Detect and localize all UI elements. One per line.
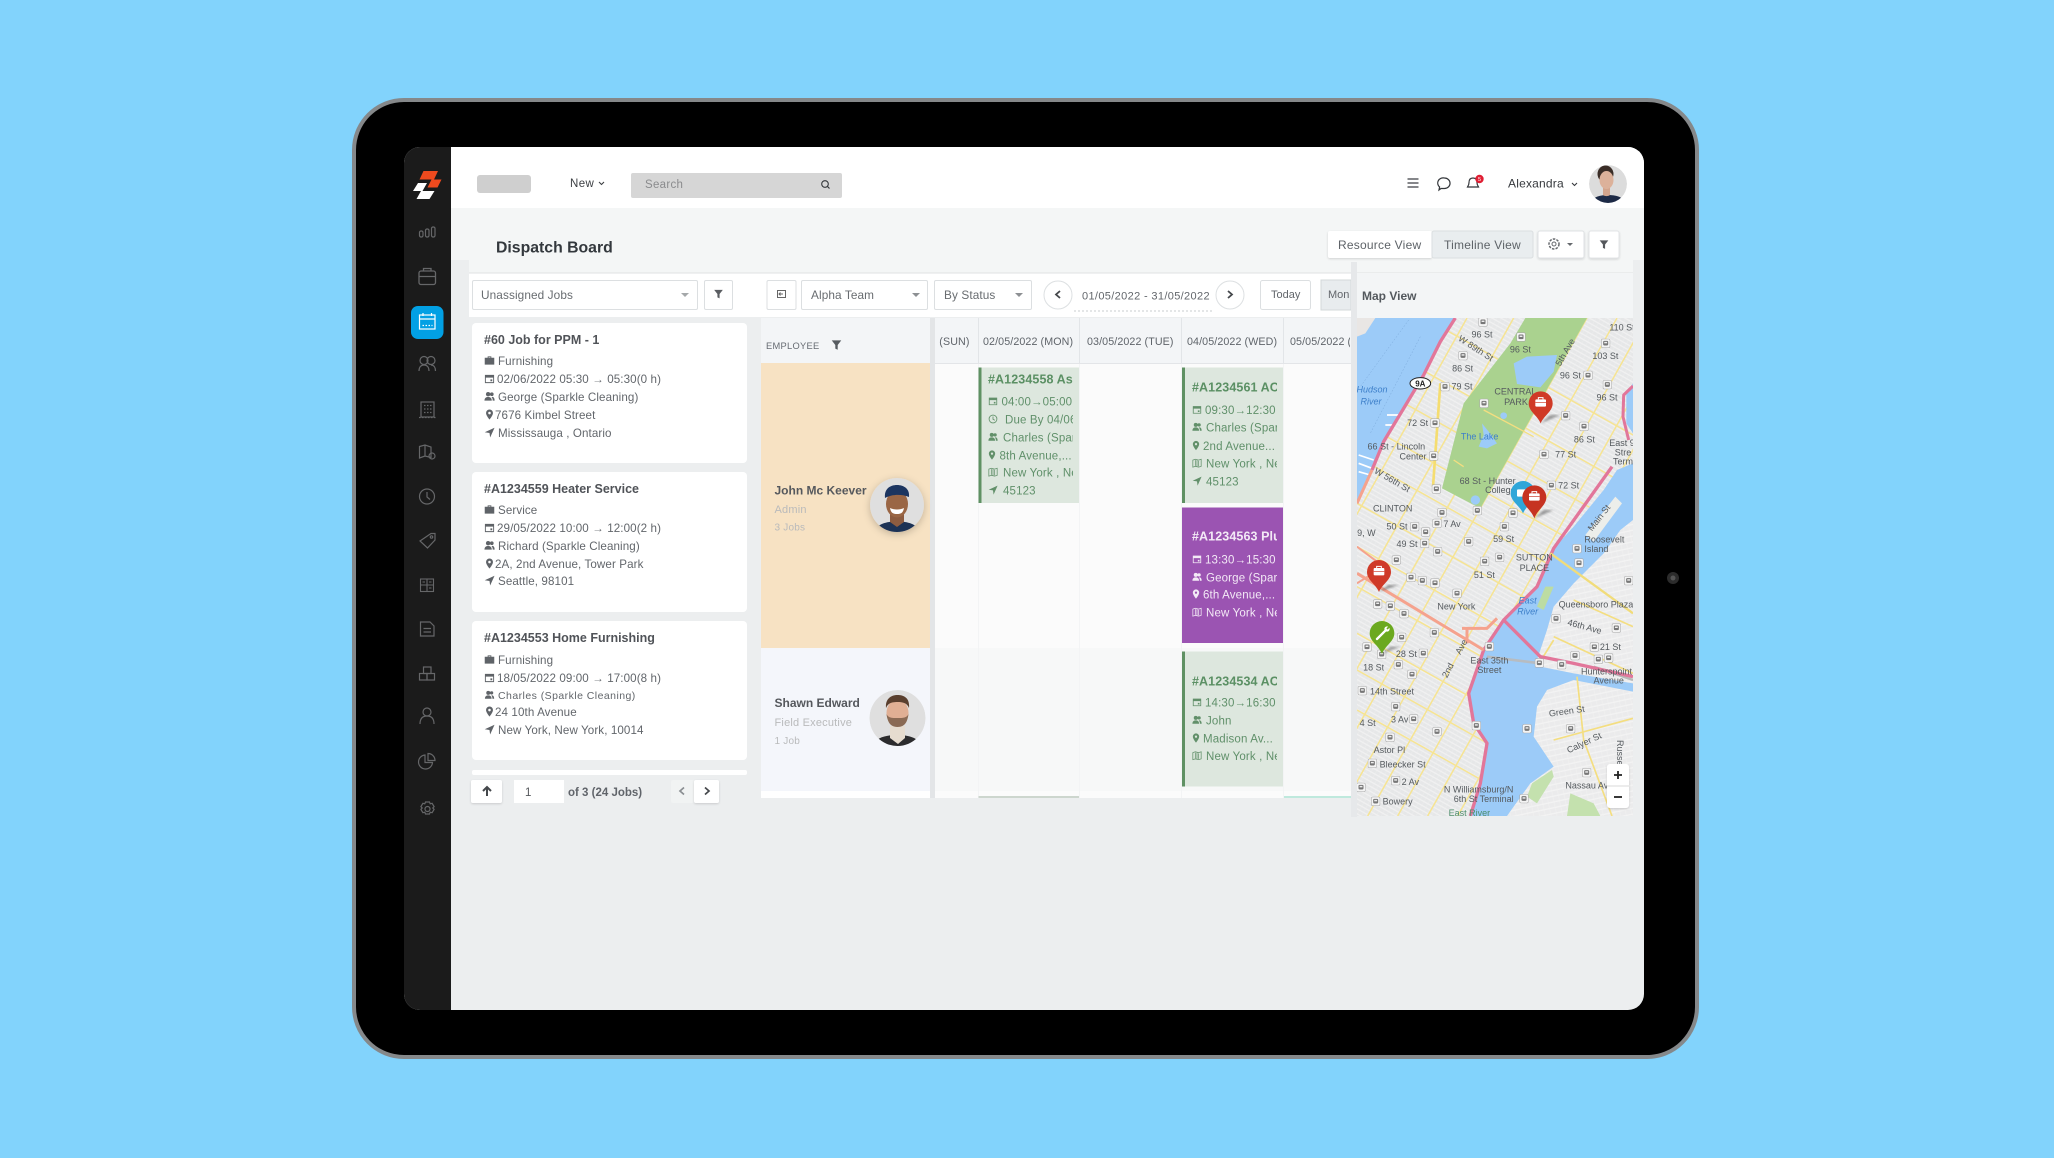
toolbar band xyxy=(469,273,1633,317)
employee row: John Mc Keever xyxy=(761,363,930,648)
icon: reports xyxy=(419,754,435,769)
icon: inventory xyxy=(420,667,434,680)
map labels: 59 St xyxy=(1493,534,1515,544)
map labels: 86 St xyxy=(1452,363,1474,373)
date header row: 02/05/2022 (MON) xyxy=(983,336,1073,348)
map labels: Calyer St xyxy=(1565,730,1604,755)
map labels: 18 St xyxy=(1363,662,1385,672)
collapse button xyxy=(767,280,796,310)
transit stops xyxy=(1357,318,1633,806)
map labels: East xyxy=(1519,595,1537,605)
job block: A1234561: 09:30→12:30 xyxy=(1205,405,1276,417)
job card: A1234553: #A1234553 Home Furnishing xyxy=(484,631,655,645)
icon: map xyxy=(420,445,435,459)
map labels: 2nd xyxy=(1440,661,1456,679)
job block: A1234534: Madison Av... xyxy=(1203,734,1273,746)
east river xyxy=(1626,383,1633,433)
logo xyxy=(413,171,442,199)
map labels: Center xyxy=(1399,451,1427,461)
map labels: 7 Av xyxy=(1443,519,1461,529)
job card: A1234553: 18/05/2022 09:00 → 17:00(8 h) xyxy=(497,672,661,685)
job block: A1234561 xyxy=(1182,368,1348,503)
job card: A1234559: 29/05/2022 10:00 → 12:00(2 h) xyxy=(497,522,661,535)
map labels: Queensboro Plaza xyxy=(1559,600,1633,610)
job block: A1234558: 04:00→05:00 xyxy=(1002,396,1072,408)
job card: A1234559: Service xyxy=(498,504,537,517)
team select: Alpha Team xyxy=(811,288,874,302)
job block: A1234558: New York , New York xyxy=(1003,468,1113,480)
pin: job blue xyxy=(1511,481,1535,513)
icon: notifications: 5 xyxy=(1478,177,1481,183)
today button xyxy=(1260,280,1310,310)
map labels: 96 St xyxy=(1596,392,1618,402)
job block: A1234561: 45123 xyxy=(1206,476,1239,488)
employee row: John Mc Keever: Admin xyxy=(774,504,807,516)
map panel header: Map View xyxy=(1362,289,1417,303)
icon: calendar active xyxy=(411,306,444,339)
job block: A1234534: John xyxy=(1206,716,1232,728)
team select xyxy=(802,280,928,310)
map labels xyxy=(1356,322,1635,818)
map labels: 6th St Terminal xyxy=(1454,794,1514,804)
month button xyxy=(1321,280,1359,310)
map labels: The Lake xyxy=(1461,432,1498,442)
date range: 01/05/2022 - 31/05/2022 xyxy=(1082,290,1210,302)
map labels: Street xyxy=(1477,665,1502,675)
map labels: Stre xyxy=(1615,448,1631,458)
job block: A1234561: 2nd Avenue... xyxy=(1203,441,1275,453)
hudson river xyxy=(1357,318,1454,503)
schedule grid xyxy=(930,262,1357,817)
map labels: Hudson xyxy=(1356,385,1388,395)
job block: A1234563: #A1234563 Plumbing xyxy=(1192,530,1319,544)
map labels: 14th Street xyxy=(1370,687,1415,697)
job block: A1234561: Charles (Sparkle Cleaning) xyxy=(1206,422,1348,434)
job card: A1234553: 24 10th Avenue xyxy=(495,706,577,719)
sidebar xyxy=(404,147,451,1010)
map labels: 96 St xyxy=(1471,329,1493,339)
search box: Search xyxy=(645,179,683,191)
settings dropdown xyxy=(1538,231,1584,258)
today button: Today xyxy=(1271,289,1301,301)
page header band xyxy=(451,208,1644,260)
pin: service green xyxy=(1370,621,1400,654)
map zoom controls xyxy=(1607,764,1629,808)
view switch buttons: Resource View xyxy=(1338,238,1421,252)
map labels: Term xyxy=(1613,457,1633,467)
job card: A1234553 xyxy=(472,621,747,760)
map labels: Bowery xyxy=(1383,797,1413,807)
map xyxy=(1357,318,1633,816)
job block: A1234558: 45123 xyxy=(1003,486,1036,498)
jobs filter button xyxy=(704,280,732,310)
job card: 60: #60 Job for PPM - 1 xyxy=(484,333,599,347)
icon: tag xyxy=(420,534,435,548)
icon: customers xyxy=(419,356,436,371)
top navigation bar xyxy=(451,147,1644,208)
map labels: East 35th xyxy=(1470,655,1508,665)
map labels: 96 St xyxy=(1560,371,1581,381)
icon: clock xyxy=(420,489,434,504)
job card: A1234553: Furnishing xyxy=(498,654,553,667)
map labels: W 56th St xyxy=(1373,466,1412,494)
pin: job north xyxy=(1529,391,1560,423)
map labels: 66 St - Lincoln xyxy=(1368,442,1425,452)
tablet frame xyxy=(354,100,1697,1057)
map labels: East River xyxy=(1449,808,1490,818)
status select xyxy=(934,280,1032,310)
pagination: 1 xyxy=(525,787,531,799)
map labels: River xyxy=(1360,396,1382,406)
job block: A1234563: George (Sparkle Cleaning) xyxy=(1206,572,1347,584)
icon: settings xyxy=(421,802,434,814)
map labels: River xyxy=(1517,606,1539,616)
new menu xyxy=(570,178,604,187)
search box xyxy=(631,173,842,198)
date range xyxy=(1074,290,1213,311)
job block: A1234534: New York , New York xyxy=(1206,751,1316,763)
map labels: Island xyxy=(1584,544,1608,554)
map labels: Bleecker St xyxy=(1380,760,1426,770)
map labels: Russe xyxy=(1615,740,1625,766)
map labels: CENTRAL xyxy=(1494,387,1536,397)
user name: Alexandra xyxy=(1508,176,1564,190)
job card: A1234559: 2A, 2nd Avenue, Tower Park xyxy=(495,558,644,571)
avatar: Shawn xyxy=(870,690,926,748)
job card: A1234553: New York, New York, 10014 xyxy=(498,724,644,737)
map labels: W 89th St xyxy=(1457,333,1496,363)
job card: 60 xyxy=(472,323,747,463)
app screen xyxy=(404,147,1770,1010)
route marker 9A: 9A xyxy=(1415,379,1426,388)
job block: A1234558 xyxy=(978,368,1145,503)
map labels: 79 St xyxy=(1451,382,1473,392)
user avatar xyxy=(1589,165,1627,204)
unassigned jobs select: Unassigned Jobs xyxy=(481,288,573,302)
map labels: College xyxy=(1485,485,1516,495)
job card: 60: Furnishing xyxy=(498,355,553,368)
map labels: Green St xyxy=(1548,704,1586,719)
map labels: 3 Av xyxy=(1391,715,1409,725)
date header row: 03/05/2022 (TUE) xyxy=(1087,336,1174,348)
job block: A1234558: 8th Avenue,... xyxy=(1000,450,1072,462)
job card: A1234559 xyxy=(472,472,747,612)
queens and brooklyn xyxy=(1487,497,1633,816)
row footer strip xyxy=(761,791,930,798)
job card: A1234559: Richard (Sparkle Cleaning) xyxy=(498,540,640,553)
job block: A1234561: #A1234561 AC Repair xyxy=(1192,380,1322,394)
job block: A1234561: New York , New York xyxy=(1206,458,1316,470)
pagination: of 3 (24 Jobs) xyxy=(568,787,642,799)
map labels: 110 St xyxy=(1609,322,1635,332)
date header row xyxy=(882,318,1377,364)
pin: job midtown xyxy=(1522,485,1554,518)
icon: user xyxy=(420,708,434,724)
pagination xyxy=(471,780,719,803)
map labels: SUTTON xyxy=(1516,552,1553,562)
filter button xyxy=(1589,231,1619,258)
icon: document xyxy=(420,622,434,636)
map panel header xyxy=(1357,273,1633,318)
date header row: 04/05/2022 (WED) xyxy=(1187,336,1277,348)
job block: A1234558: Due By 04/06/2022 xyxy=(1005,414,1106,426)
employee row: John Mc Keever: 3 Jobs xyxy=(774,522,805,534)
month button: Month xyxy=(1328,289,1359,301)
new menu: New xyxy=(570,178,595,190)
map labels: CLINTON xyxy=(1373,503,1412,513)
map labels: 72 St xyxy=(1407,418,1429,428)
job block: A1234534 xyxy=(1182,652,1322,786)
map labels: 103 St xyxy=(1592,351,1619,361)
map labels: N Williamsburg/N xyxy=(1444,785,1513,795)
avatar: John xyxy=(870,478,924,534)
icon: menu xyxy=(1408,179,1418,187)
map labels: 2 Av xyxy=(1402,777,1420,787)
camera xyxy=(1667,572,1679,584)
map labels: Main St xyxy=(1586,502,1613,533)
icon: notifications xyxy=(1468,175,1484,187)
company logo placeholder xyxy=(477,175,531,193)
job block: A1234563: 13:30→15:30 xyxy=(1205,554,1276,566)
map labels: 96 St xyxy=(1510,344,1531,354)
map labels: 68 St - Hunter xyxy=(1460,476,1516,486)
date header row: 05/05/2022 (THU) xyxy=(1290,336,1377,348)
map labels: 72 St xyxy=(1558,481,1580,491)
job block: A1234563: New York , New York xyxy=(1206,608,1316,620)
map labels: 77 St xyxy=(1555,450,1577,460)
map labels: 86 St xyxy=(1574,435,1595,445)
map labels: 49 St xyxy=(1396,539,1418,549)
job block: A1234563: 6th Avenue,... xyxy=(1203,590,1275,602)
map labels: 51 St xyxy=(1474,570,1495,580)
employee row: John Mc Keever: John Mc Keever xyxy=(774,484,867,498)
status select: By Status xyxy=(944,288,995,302)
map labels: Nassau Av xyxy=(1565,781,1609,791)
map labels: PLACE xyxy=(1520,563,1549,573)
job card: A1234553: Charles (Sparkle Cleaning) xyxy=(498,690,636,702)
icon: analytics xyxy=(420,227,435,237)
unassigned jobs select xyxy=(472,280,698,310)
employee column header: EMPLOYEE xyxy=(766,341,820,351)
employee row: Shawn Edward xyxy=(761,648,930,791)
employee row: Shawn Edward: 1 Job xyxy=(774,736,800,747)
map labels: 9, W xyxy=(1357,528,1376,538)
map labels: 21 St xyxy=(1600,642,1621,652)
map labels: New York xyxy=(1437,602,1476,612)
job card: 60: 02/06/2022 05:30 → 05:30(0 h) xyxy=(497,373,661,386)
job block: A1234558: #A1234558 Assembly xyxy=(988,372,1117,386)
route marker 9A xyxy=(1410,378,1431,389)
pin: job west xyxy=(1367,560,1399,592)
job card: A1234559: #A1234559 Heater Service xyxy=(484,482,639,496)
central park xyxy=(1442,318,1587,508)
previous date button xyxy=(1044,281,1072,309)
map labels: Hunterspoint xyxy=(1581,666,1633,676)
map labels: 5th Ave xyxy=(1553,337,1577,368)
next row job stubs xyxy=(978,796,1351,798)
map labels: East 9 xyxy=(1609,438,1635,448)
employee row: Shawn Edward: Field Executive xyxy=(774,717,852,729)
map labels: Astor Pl xyxy=(1374,745,1405,755)
job card: A1234559: Seattle, 98101 xyxy=(498,575,574,588)
view switch buttons xyxy=(1328,231,1533,258)
map labels: 46th Ave xyxy=(1566,617,1603,636)
map labels: 50 St xyxy=(1386,522,1408,532)
map labels: Avenue xyxy=(1593,676,1624,686)
highways xyxy=(1357,318,1633,816)
job block: A1234558: Charles (Sparkle Cleaning) xyxy=(1003,432,1145,444)
user name xyxy=(1508,179,1578,188)
job block: A1234563 xyxy=(1182,508,1347,643)
page title: Dispatch Board xyxy=(496,240,613,256)
job card: 60: Mississauga , Ontario xyxy=(498,427,612,440)
next card stub xyxy=(472,770,747,775)
map labels: Roosevelt xyxy=(1584,535,1625,545)
job block: A1234534: 14:30→16:30 xyxy=(1205,698,1276,710)
employee row: Shawn Edward: Shawn Edward xyxy=(774,696,860,710)
map labels: 28 St xyxy=(1396,649,1417,659)
next date button xyxy=(1216,281,1244,309)
date header row: 01/05/2022 (SUN) xyxy=(882,336,970,348)
map labels: PARK xyxy=(1504,397,1528,407)
icon: building xyxy=(419,402,436,418)
employee column header xyxy=(761,318,930,363)
job card: 60: 7676 Kimbel Street xyxy=(495,409,596,422)
view switch buttons: Timeline View xyxy=(1444,238,1521,252)
map labels: 4 St xyxy=(1360,718,1376,728)
icon: calculator xyxy=(420,579,434,592)
icon: jobs xyxy=(419,268,436,284)
job block: A1234534: #A1234534 AC Repair xyxy=(1192,674,1322,688)
map labels: Ave xyxy=(1453,638,1469,656)
job card: 60: George (Sparkle Cleaning) xyxy=(498,391,638,404)
icon: chat xyxy=(1438,178,1450,190)
